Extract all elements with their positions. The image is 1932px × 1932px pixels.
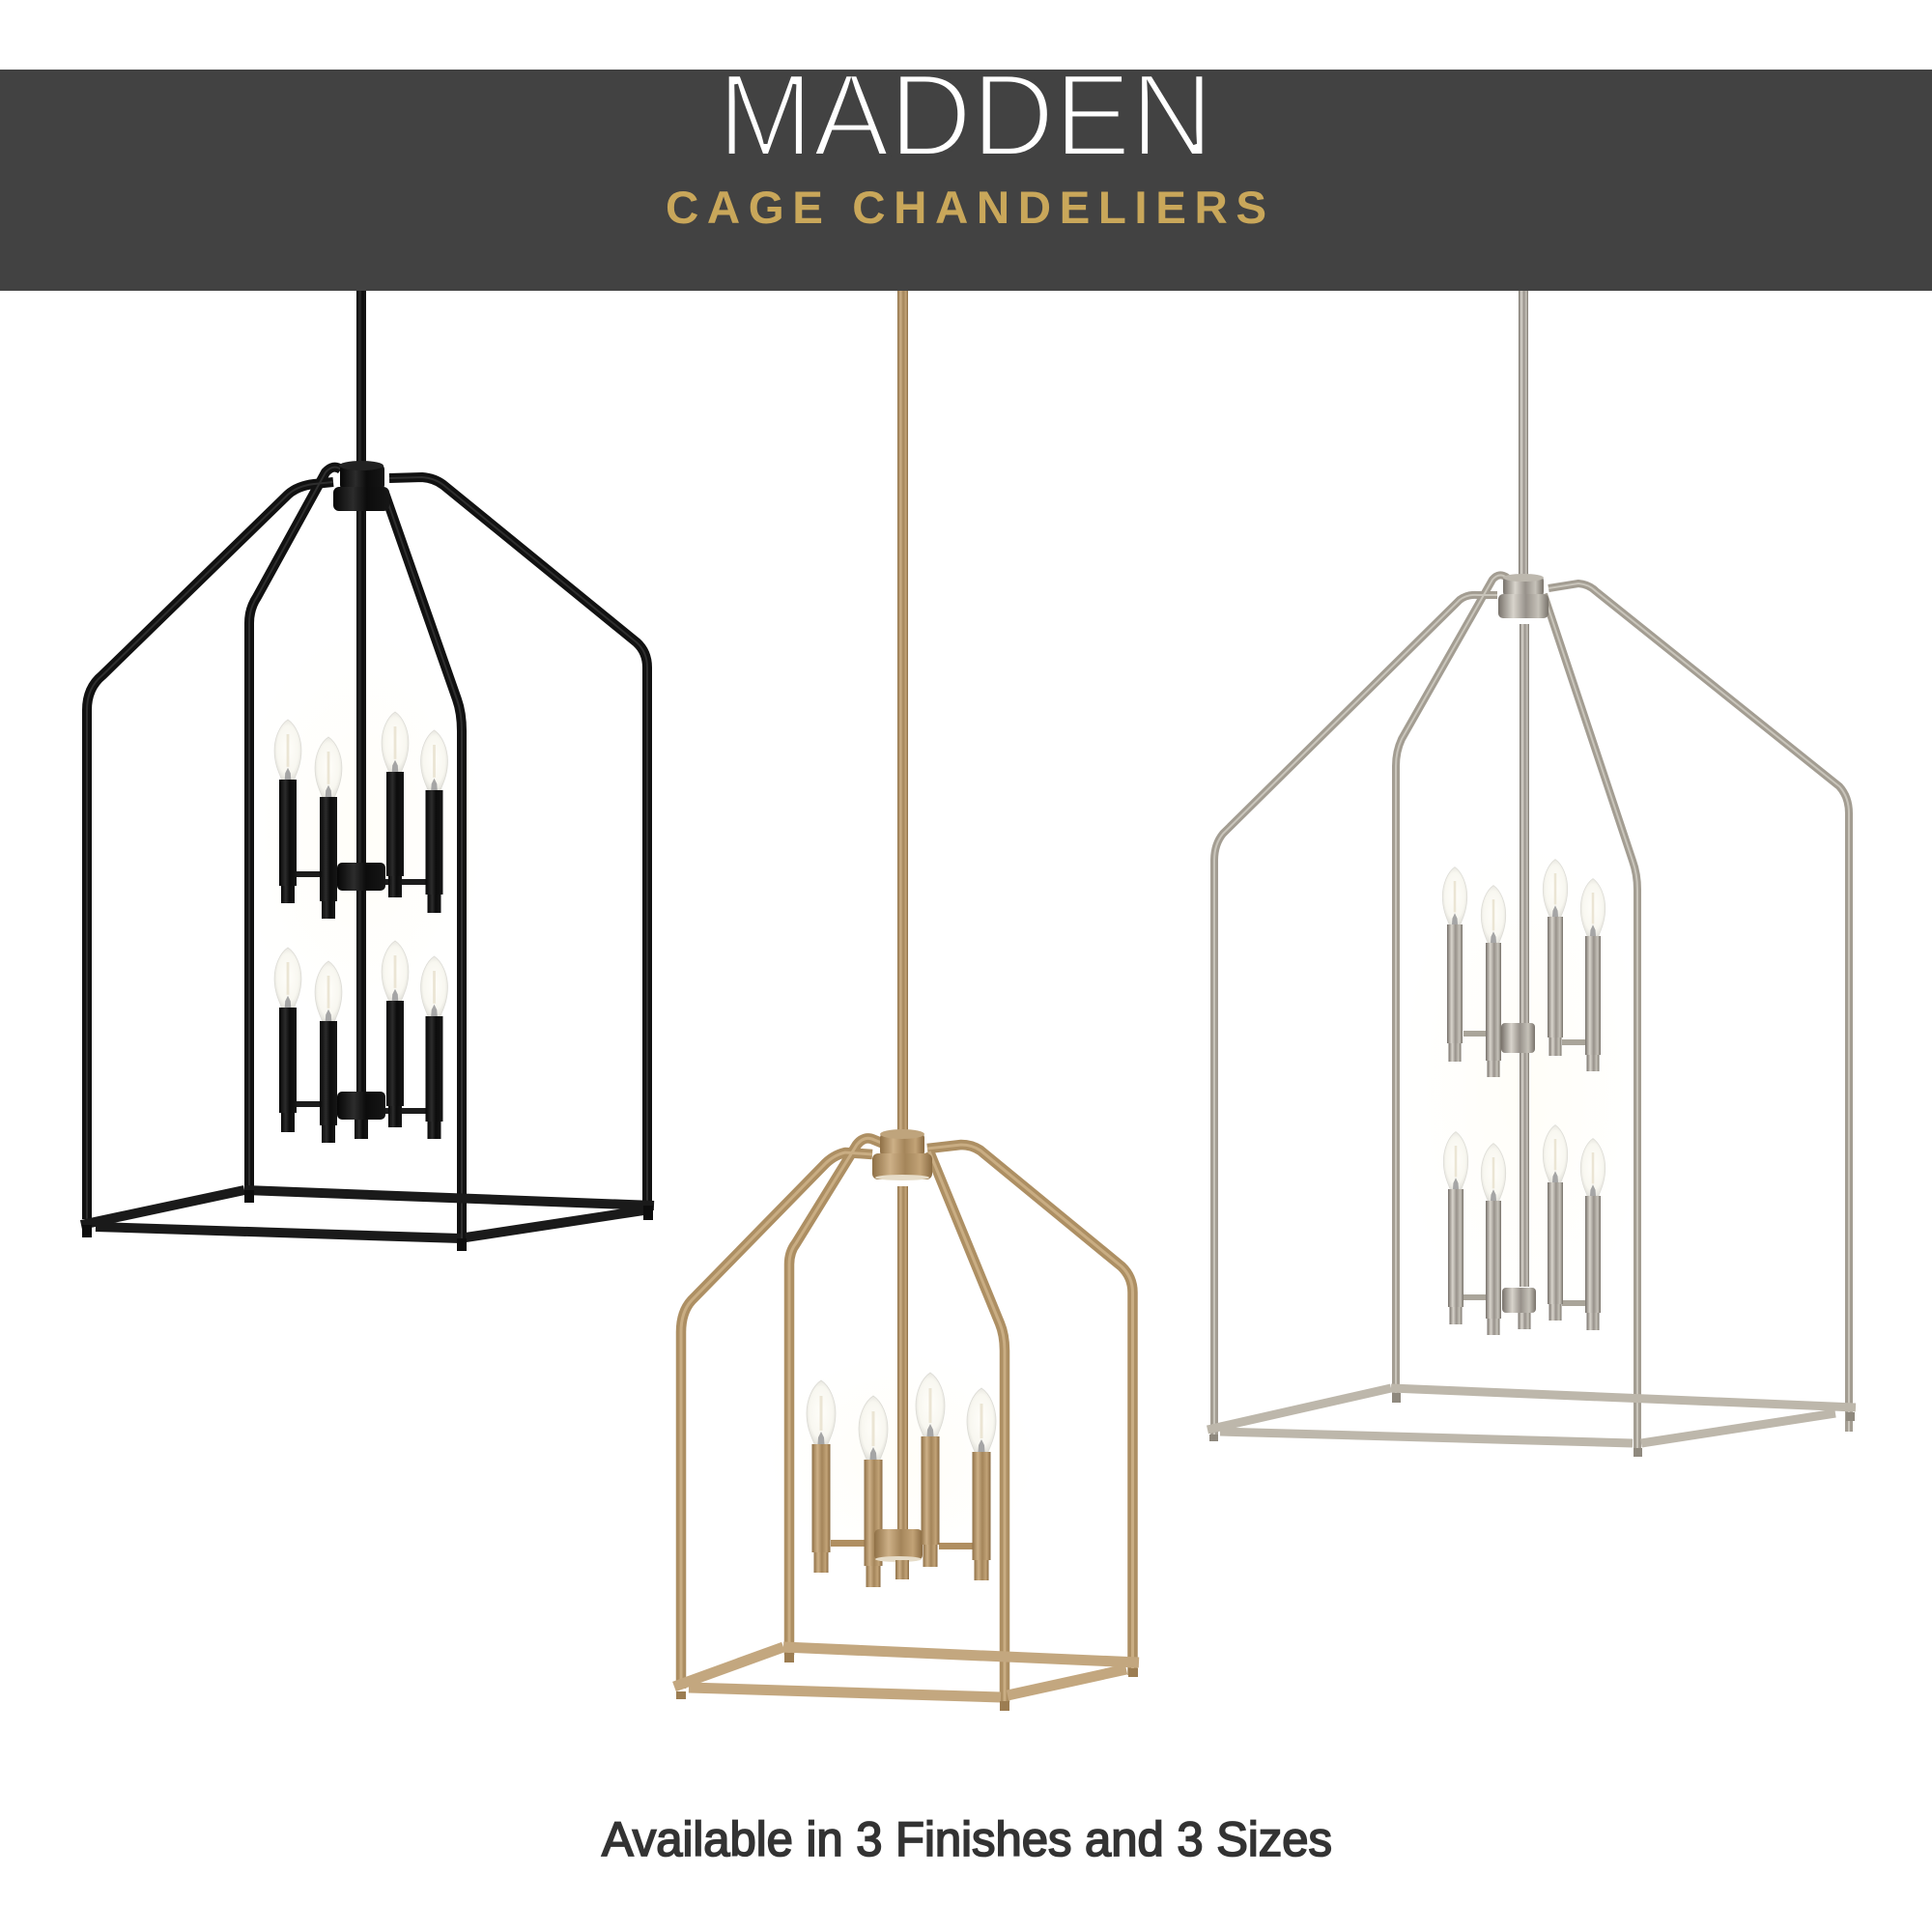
cage arms xyxy=(1214,575,1849,1449)
bulb glow xyxy=(236,628,487,1034)
bulb glow xyxy=(1399,840,1650,1343)
subtitle: CAGE CHANDELIERS xyxy=(666,183,1266,234)
brass chandelier xyxy=(674,291,1139,1711)
square base xyxy=(1208,1388,1856,1443)
square base xyxy=(81,1190,654,1238)
header band xyxy=(0,70,1932,291)
stem rod xyxy=(356,291,366,465)
title: MADDEN xyxy=(718,49,1213,181)
black chandelier xyxy=(81,291,654,1251)
upper candle tier xyxy=(1442,860,1605,1077)
center rod xyxy=(897,1186,908,1529)
center rod xyxy=(1520,624,1529,1287)
ceiling hub xyxy=(872,1129,932,1180)
base feet xyxy=(676,1653,1138,1711)
upper candle tier xyxy=(274,712,447,919)
lower candle tier xyxy=(1443,1125,1605,1335)
nickel chandelier xyxy=(1208,291,1856,1457)
ceiling hub xyxy=(1498,574,1548,618)
stem rod xyxy=(1519,291,1528,577)
cage arms xyxy=(87,468,647,1244)
lower candle tier xyxy=(274,941,447,1143)
bulb glow xyxy=(767,1352,1037,1565)
base feet xyxy=(1209,1393,1855,1457)
ceiling hub xyxy=(333,461,389,511)
candle tier xyxy=(807,1373,996,1587)
base feet xyxy=(82,1190,653,1251)
footer caption: Available in 3 Finishes and 3 Sizes xyxy=(602,1812,1332,1866)
stem rod xyxy=(897,291,908,1133)
center rod xyxy=(356,511,366,1122)
square base xyxy=(674,1647,1139,1697)
cage arms xyxy=(681,1138,1132,1702)
